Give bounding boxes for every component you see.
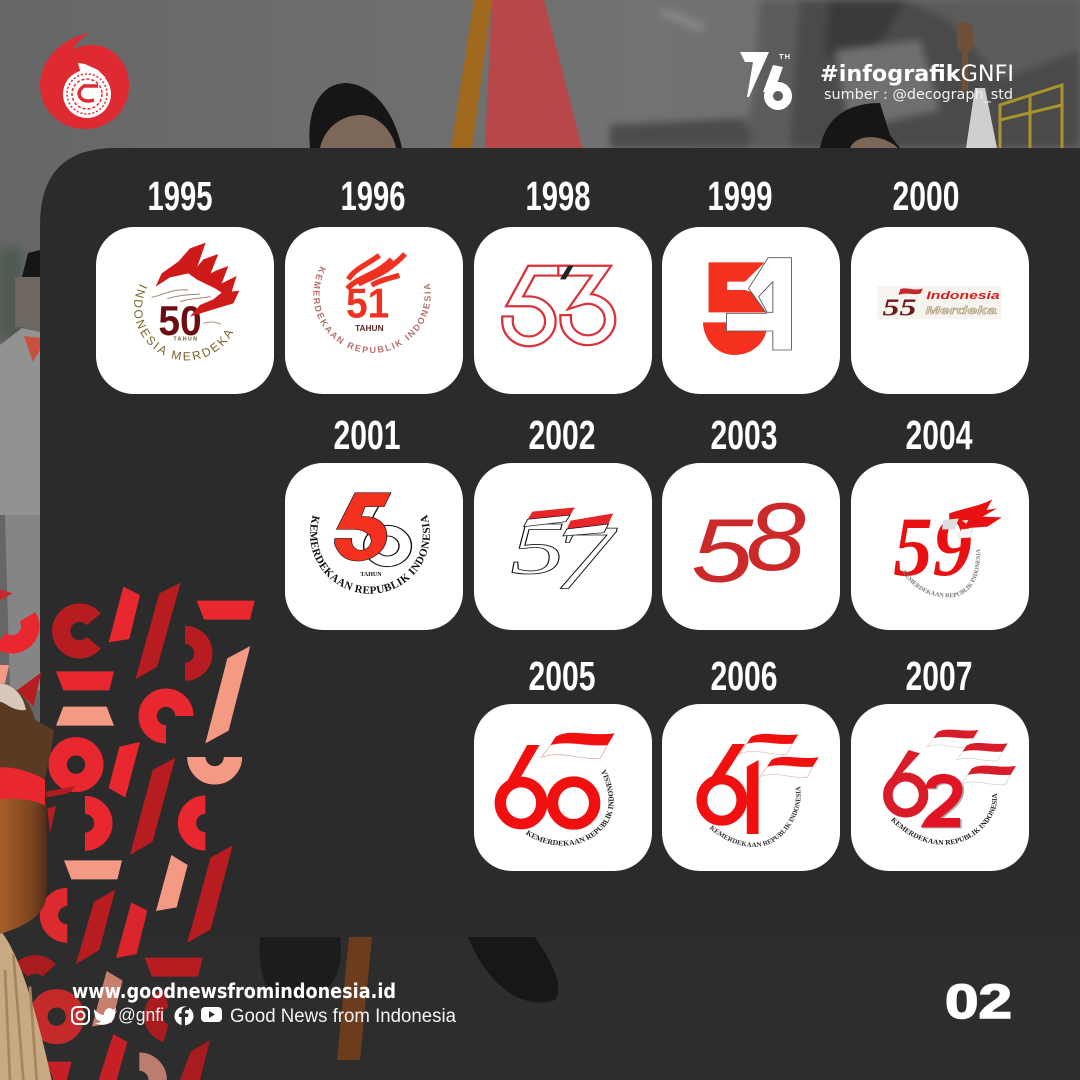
logo 2003: [691, 483, 806, 601]
logo 1996: KEMERDEKAAN REPUBLIK INDONESIA: [313, 266, 431, 354]
logo 2002: [510, 507, 618, 609]
year labels: 2000: [892, 173, 960, 219]
logo 2005: KEMERDEKAAN REPUBLIK INDONESIA: [526, 769, 614, 846]
twitter handle: @gnfi: [118, 1005, 164, 1025]
main dark panel: [40, 148, 1080, 937]
logo 2000: Merdeka: [925, 304, 997, 317]
logo 2002: 5: [510, 507, 565, 590]
year labels: 2001: [334, 412, 400, 458]
logo 2007: [883, 730, 1016, 845]
decorative geometric pattern: [0, 583, 255, 1080]
GNFI logo: [40, 33, 129, 129]
logo 2002: 7: [553, 507, 618, 609]
logo 1995: TAHUN: [173, 337, 198, 343]
logo 1999: [703, 258, 791, 355]
website address: www.goodnewsfromindonesia.id: [72, 979, 396, 1003]
year labels: [148, 173, 973, 699]
logo 2006: KEMERDEKAAN REPUBLIK INDONESIA: [709, 786, 801, 847]
logo 2001: KEMERDEKAAN REPUBLIK INDONESIA: [310, 514, 430, 594]
year labels: 2006: [710, 653, 778, 699]
page name: Good News from Indonesia: [230, 1006, 456, 1027]
year labels: 2002: [528, 412, 596, 458]
icon: facebook: [174, 1006, 194, 1026]
icon: youtube: [201, 1007, 222, 1022]
year labels: 2003: [710, 412, 778, 458]
page number: 02: [945, 976, 1012, 1029]
logo 1996: 51: [346, 279, 389, 326]
year labels: 1995: [148, 173, 212, 219]
logo 2004: KEMERDEKAAN REPUBLIK INDONESIA: [902, 549, 980, 598]
icon: instagram: [72, 1007, 89, 1024]
year labels: 1998: [526, 173, 590, 219]
76th anniversary mark: TH: [779, 52, 791, 61]
logo 2003: 8: [746, 483, 806, 591]
year labels: 1996: [340, 173, 406, 219]
logo 1998: [507, 266, 610, 341]
year labels: 2004: [906, 412, 973, 458]
76th anniversary mark: [740, 52, 791, 106]
icon: twitter: [94, 1008, 117, 1025]
dancer figure: [0, 589, 76, 1080]
logo 2000: Indonesia: [926, 289, 1000, 302]
logo 1996: TAHUN: [355, 323, 384, 333]
year labels: 1999: [708, 173, 772, 219]
logo 2007: KEMERDEKAAN REPUBLIK INDONESIA: [890, 794, 998, 845]
hashtag heading: #infografikGNFI: [820, 62, 1014, 87]
logo 2001: TAHUN: [360, 572, 382, 578]
logo 2004: 59: [893, 499, 972, 594]
logo 2000: [877, 286, 1001, 321]
logo 2003: 5: [691, 500, 754, 601]
year labels: 2005: [528, 653, 596, 699]
logo 2000: 55: [882, 295, 916, 321]
logo 1995: INDONESIA MERDEKA: [134, 284, 234, 360]
logo 2005: [494, 732, 615, 846]
white logo cards: [96, 227, 1029, 871]
logo 1995: [134, 242, 240, 360]
year labels: 2007: [906, 653, 972, 699]
logo 1995: 50: [158, 297, 202, 344]
logo 2006: [696, 734, 818, 847]
source credit: sumber : @decograph_std: [824, 87, 1013, 103]
